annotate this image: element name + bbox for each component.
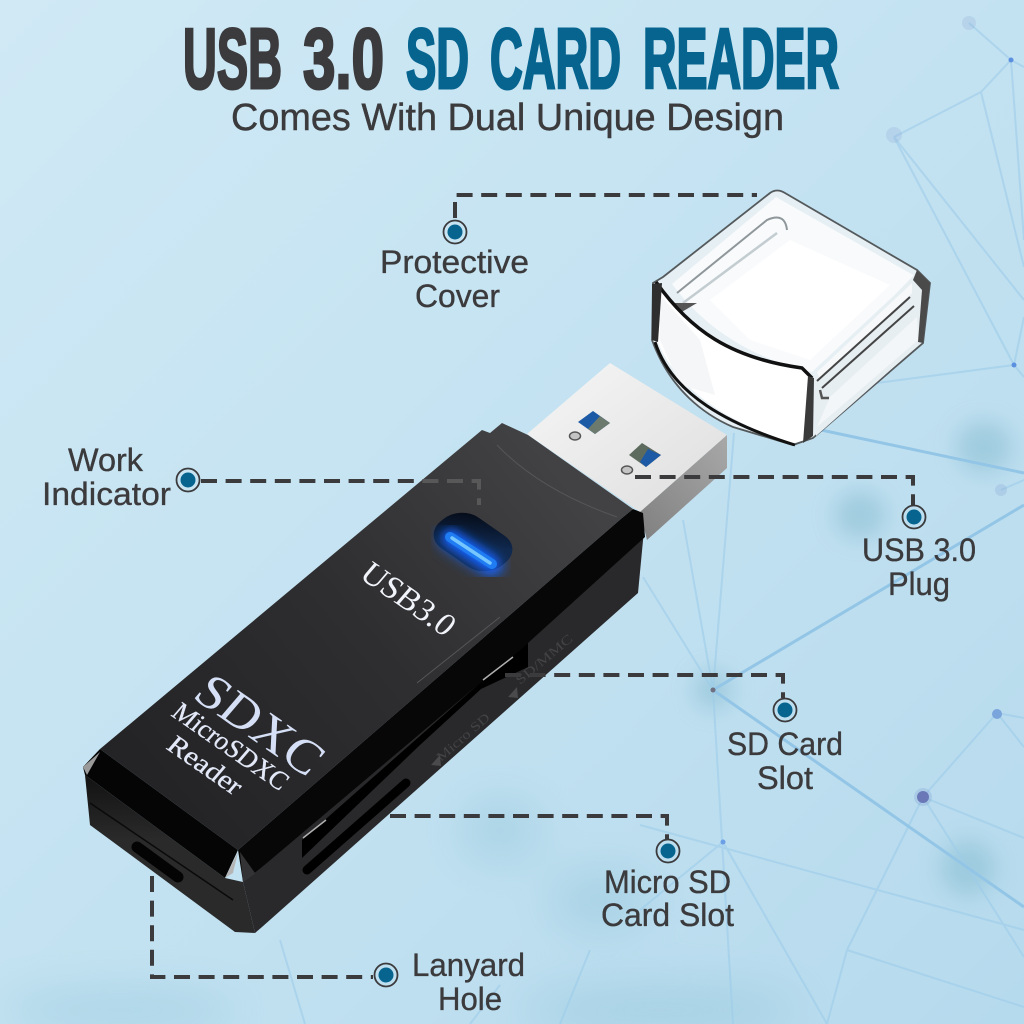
protective cover — [652, 190, 930, 445]
corner facet right — [225, 852, 238, 878]
front rim line — [90, 803, 233, 900]
print: USB3.0: USB3.0 — [353, 556, 463, 644]
label: usb plug: Plug — [888, 566, 950, 602]
side marker: SD — [508, 687, 518, 698]
cover front — [657, 283, 812, 443]
cover top — [672, 197, 915, 372]
top face — [100, 423, 633, 850]
front bevel — [83, 749, 238, 878]
title: USB — [183, 12, 282, 107]
side panel — [243, 530, 644, 933]
cover notch — [673, 303, 697, 313]
title: 3.0 — [303, 12, 384, 107]
side marker: micro — [431, 755, 441, 766]
label: usb plug — [862, 532, 976, 602]
marker: work indicator — [176, 468, 200, 492]
marker: protective cover — [444, 220, 466, 244]
cover end — [913, 270, 930, 343]
cover side — [814, 272, 928, 436]
title: READER — [643, 12, 839, 107]
front face — [85, 775, 255, 933]
lanyard hole — [137, 847, 178, 877]
slot highlights — [303, 657, 513, 838]
upper SD slot — [302, 643, 528, 858]
label: lanyard hole: Lanyard — [412, 947, 525, 983]
cover groove — [817, 297, 914, 388]
title: SD — [406, 12, 469, 107]
leader line: sd card slot — [505, 675, 783, 698]
label: micro sd slot: Micro SD — [604, 864, 731, 900]
label: sd card slot — [727, 726, 843, 796]
label: work indicator: Work — [68, 442, 144, 478]
marker: micro sd slot — [656, 840, 680, 862]
label: work indicator — [42, 442, 171, 512]
cover hook — [820, 390, 829, 398]
print: Reader: Reader — [161, 730, 249, 800]
label: sd card slot: SD Card — [727, 726, 843, 762]
label: protective cover: Cover — [415, 278, 500, 314]
marker: lanyard hole — [374, 964, 398, 986]
side label: Micro SD: Micro SD — [433, 710, 493, 764]
leader line: micro sd slot — [390, 816, 667, 840]
label: usb plug: USB 3.0 — [862, 532, 976, 568]
top face highlight — [417, 445, 617, 683]
marker: sd card slot — [774, 698, 796, 722]
label: work indicator: Indicator — [42, 476, 171, 512]
label: lanyard hole — [412, 947, 525, 1017]
leader line: work indicator — [201, 481, 479, 505]
label: sd card slot: Slot — [757, 760, 813, 796]
print: MicroSDXC: MicroSDXC — [166, 697, 295, 796]
label: micro sd slot — [601, 864, 734, 933]
label: micro sd slot: Card Slot — [601, 897, 734, 933]
right bevel — [238, 509, 645, 882]
print: SDXC: SDXC — [184, 663, 337, 786]
side label: SD/MMC: SD/MMC — [512, 631, 576, 687]
leader line: protective cover — [455, 195, 757, 218]
corner facet left — [83, 752, 100, 775]
label: lanyard hole: Hole — [438, 981, 502, 1017]
label: protective cover: Protective — [380, 244, 529, 280]
lower micro SD slot — [307, 783, 406, 870]
leader line: usb plug — [635, 477, 913, 505]
subtitle: Comes With Dual Unique Design — [231, 97, 784, 139]
cover ridge — [677, 218, 787, 293]
title: CARD — [490, 12, 621, 107]
LED window — [423, 505, 523, 579]
USB 3.0 plug — [527, 363, 727, 540]
cover silhouette — [652, 190, 930, 445]
title — [183, 12, 839, 107]
leader line: lanyard hole — [152, 876, 373, 977]
label: protective cover — [380, 244, 529, 314]
marker: usb plug — [902, 506, 926, 528]
card reader body — [83, 423, 645, 933]
